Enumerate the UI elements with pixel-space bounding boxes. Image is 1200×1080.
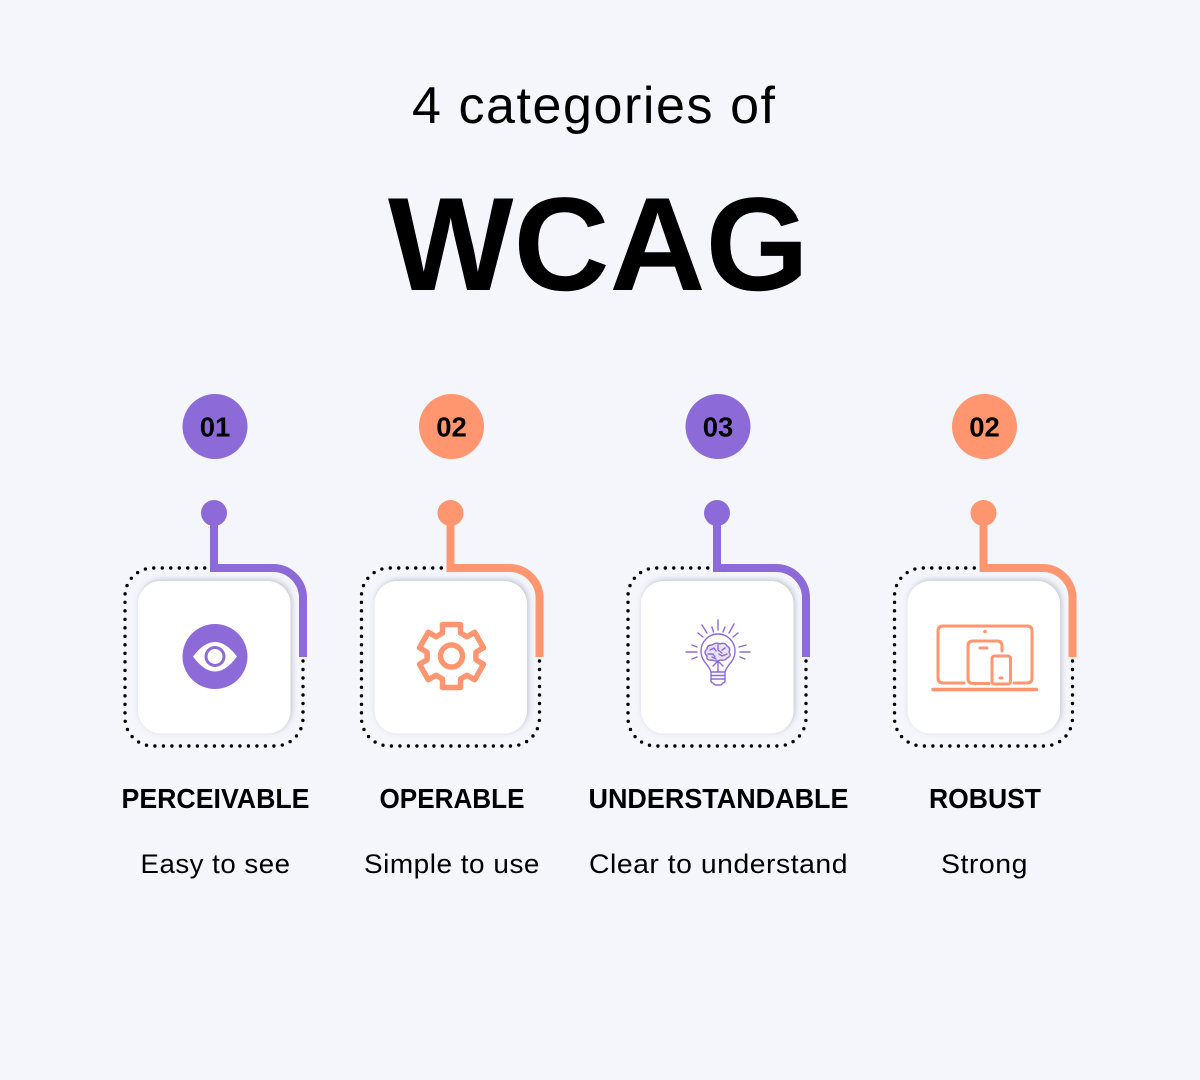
- description: Strong: [941, 849, 1028, 879]
- description: Clear to understand: [589, 849, 848, 879]
- number badge 02: 02: [969, 412, 1000, 442]
- description: Easy to see: [140, 849, 290, 879]
- panel: understandable: [588, 394, 848, 879]
- number badge 03: [686, 394, 750, 459]
- heading: PERCEIVABLE: [122, 783, 310, 814]
- card: [138, 581, 290, 734]
- heading: ROBUST: [929, 783, 1041, 814]
- number badge 02: [419, 394, 484, 459]
- dotted frame: [362, 568, 540, 746]
- number badge 02: [952, 394, 1017, 459]
- connector: [704, 500, 806, 657]
- description: Simple to use: [364, 849, 540, 879]
- panel: operable: [362, 394, 540, 879]
- panel: robust: [894, 394, 1072, 879]
- card: [374, 581, 527, 734]
- icon: laptop, tablet and phone: [933, 626, 1036, 690]
- number badge 03: 03: [703, 412, 733, 442]
- connector: [201, 500, 303, 657]
- icon: gear: [420, 624, 484, 688]
- heading: UNDERSTANDABLE: [588, 783, 848, 814]
- number badge 01: 01: [200, 412, 230, 442]
- dotted frame: [894, 568, 1072, 746]
- dotted frame: [125, 568, 303, 746]
- number badge 02: 02: [436, 412, 467, 442]
- connector: [438, 500, 540, 657]
- icon: light bulb with brain: [686, 620, 750, 685]
- title: WCAG: WCAG: [388, 171, 809, 319]
- panel: perceivable: [122, 394, 310, 879]
- card: [908, 581, 1060, 734]
- connector: [970, 500, 1072, 657]
- dotted frame: [628, 568, 806, 746]
- title: 4 categories of: 4 categories of: [412, 77, 776, 135]
- number badge 01: [182, 394, 248, 459]
- heading: OPERABLE: [380, 783, 524, 814]
- card: [641, 581, 794, 734]
- icon: eye: [182, 624, 248, 689]
